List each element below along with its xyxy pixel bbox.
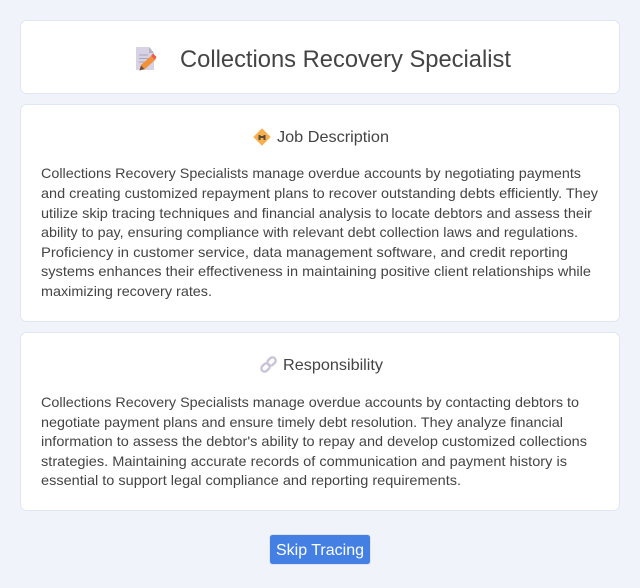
title: Collections Recovery Specialist (180, 46, 511, 73)
text block: responsibility: information to assess the debtor's ability to repay and develop customized collections (41, 433, 587, 449)
icon: document with pencil (136, 47, 156, 70)
text block: job description: maximizing recovery rates. (41, 283, 212, 299)
text block: responsibility: essential to support legal compliance and reporting requirements. (41, 472, 461, 488)
heading: job description: Job Description (277, 129, 389, 146)
text block: responsibility: negotiate payment plans and ensure timely debt resolution. They analyze financial (41, 414, 563, 430)
icon: orange diamond sign (254, 129, 270, 145)
text block: job description: Collections Recovery Specialists manage overdue accounts by negotiating payments (41, 165, 581, 181)
text block: responsibility: strategies. Maintaining accurate records of communication and payment history is (41, 453, 567, 469)
text block: responsibility (41, 394, 587, 488)
text block: job description (41, 165, 598, 299)
text block: responsibility: Collections Recovery Specialists manage overdue accounts by contacting debtors to (41, 394, 579, 410)
text block: job description: systems enhances their effectiveness in maintaining positive client relationships while (41, 263, 591, 279)
icon: chain link (260, 356, 277, 373)
button: skip tracing: Skip Tracing (276, 542, 364, 559)
text block: job description: Proficiency in customer service, data management software, and credit reporting (41, 244, 568, 260)
text block: job description: ability to pay, ensuring compliance with relevant debt collection laws and regulations. (41, 224, 578, 240)
heading: responsibility: Responsibility (283, 357, 383, 374)
text block: job description: utilize skip tracing techniques and financial analysis to locate debtors and assess their (41, 205, 592, 221)
text block: job description: and creating customized repayment plans to recover outstanding debts efficiently. They (41, 185, 598, 201)
button: skip tracing (270, 534, 370, 564)
header panel (20, 20, 620, 94)
panel: job description (20, 104, 620, 322)
panel: responsibility (20, 332, 620, 510)
